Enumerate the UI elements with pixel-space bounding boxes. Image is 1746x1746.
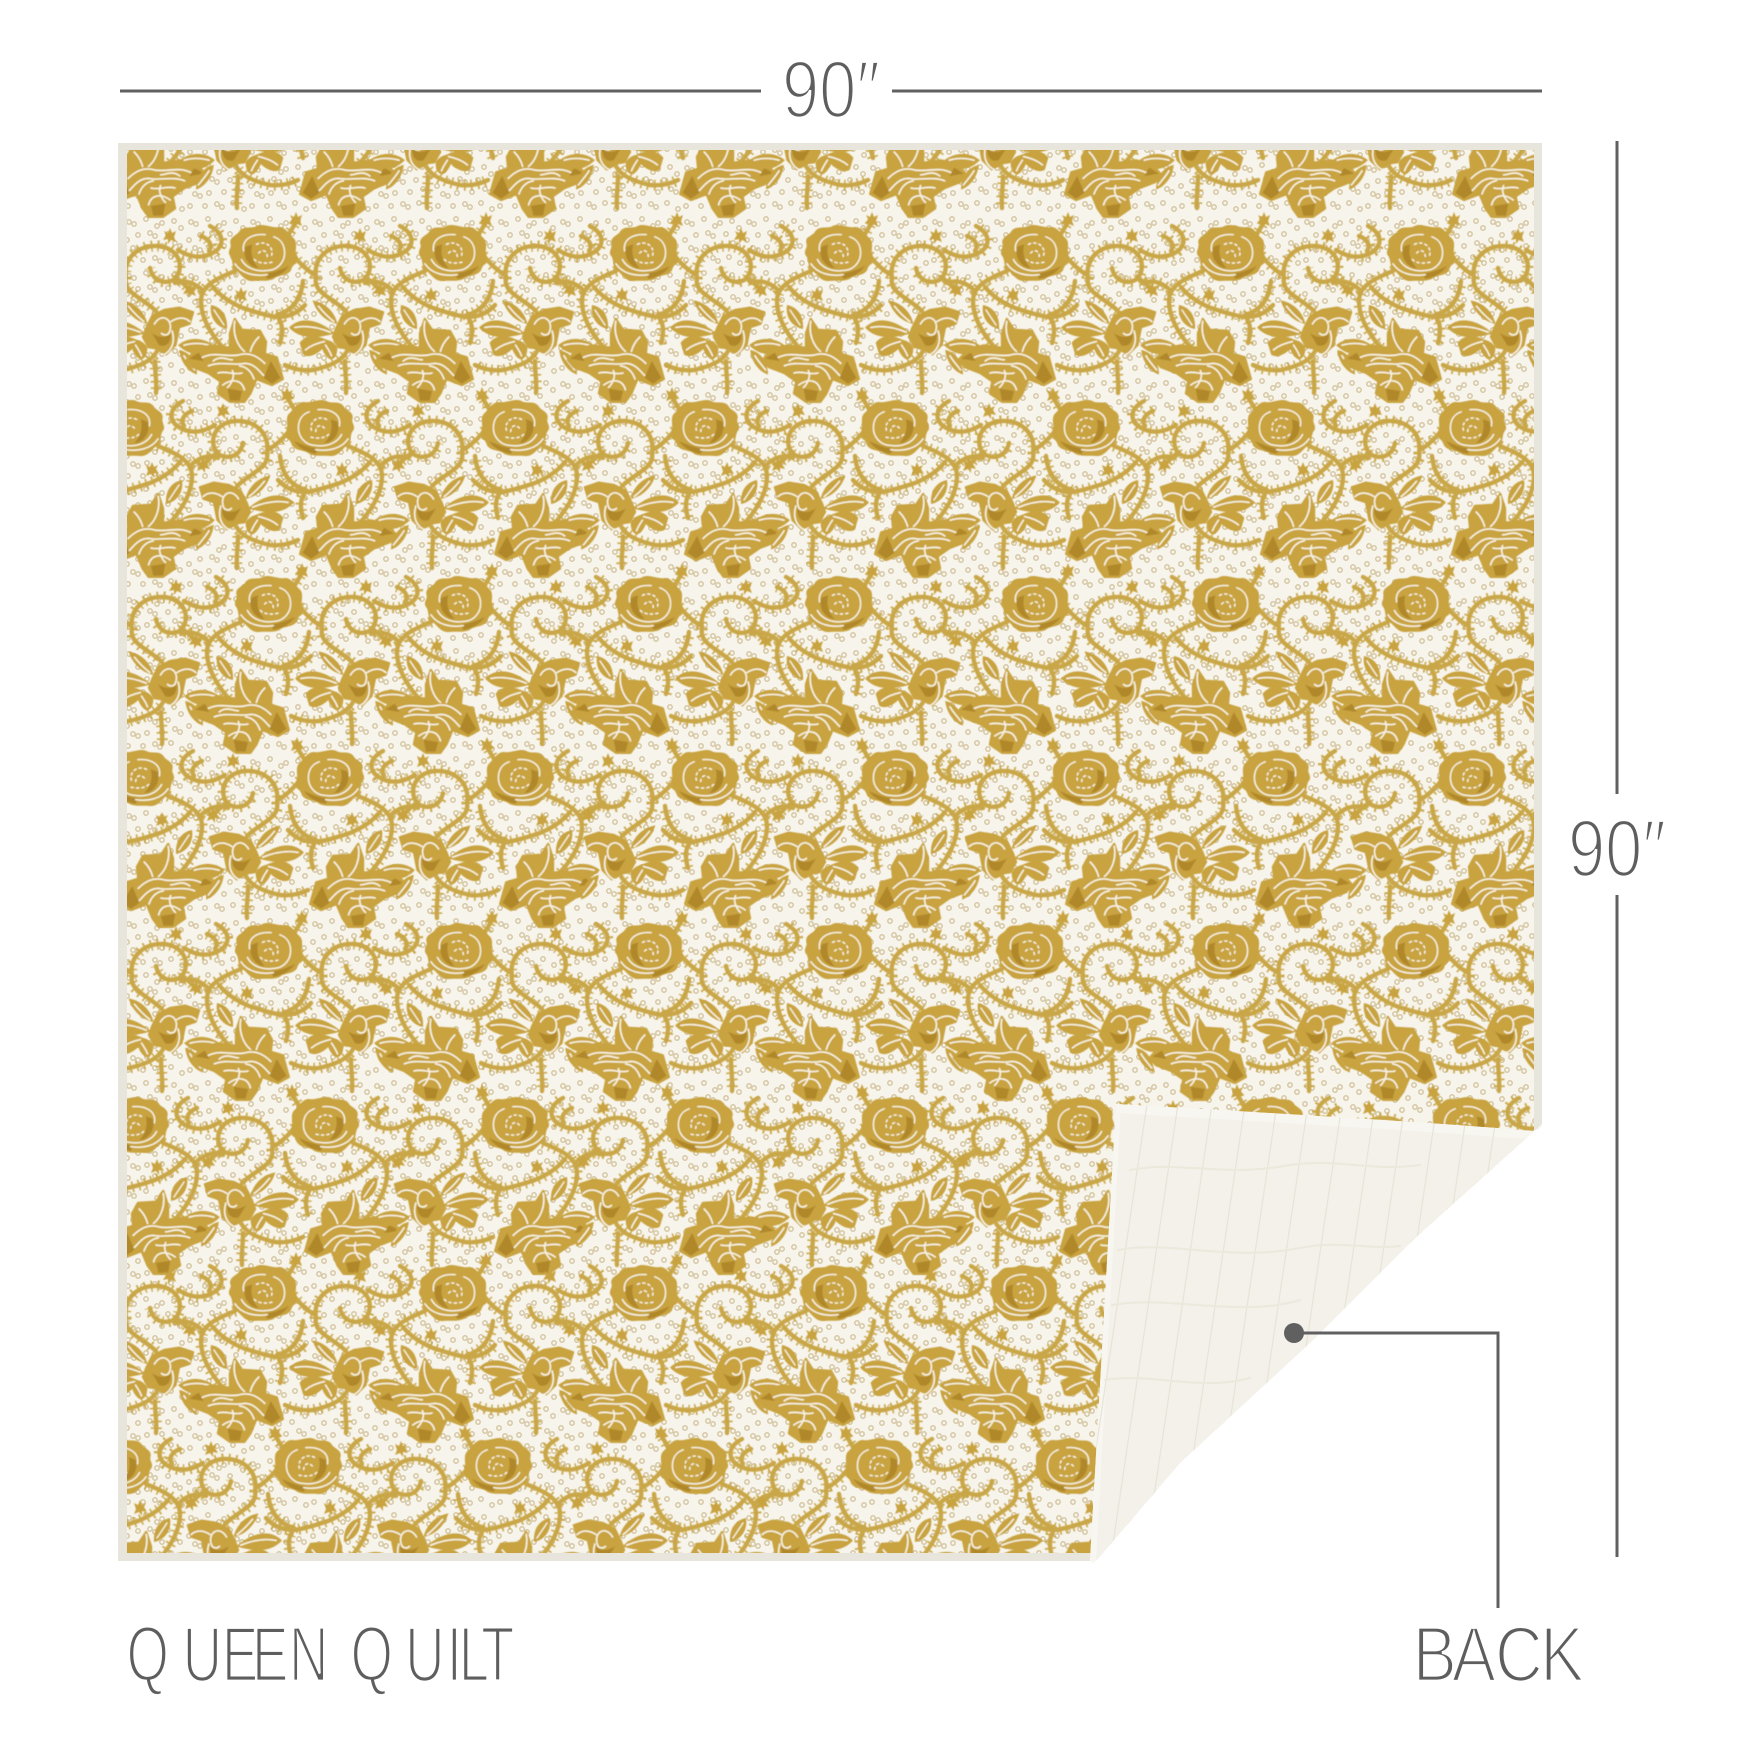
callout leader line <box>1294 1333 1498 1608</box>
quilt front fabric <box>127 150 1534 1553</box>
folded corner cut-away <box>1085 1118 1546 1570</box>
dimension line <box>120 90 1542 92</box>
floral print <box>127 150 1534 1553</box>
folded corner: quilt back <box>1076 1104 1542 1584</box>
width label: 90″ <box>782 45 880 135</box>
title: queen quilt: QUEEN QUILT <box>126 1611 514 1698</box>
dimension line <box>1616 141 1618 1557</box>
quilt binding <box>118 143 1542 1561</box>
callout dot <box>1284 1323 1304 1343</box>
height label: 90″ <box>1568 804 1666 894</box>
callout: back <box>1284 1323 1584 1698</box>
back label: BACK <box>1413 1611 1584 1698</box>
quilt <box>118 143 1542 1562</box>
